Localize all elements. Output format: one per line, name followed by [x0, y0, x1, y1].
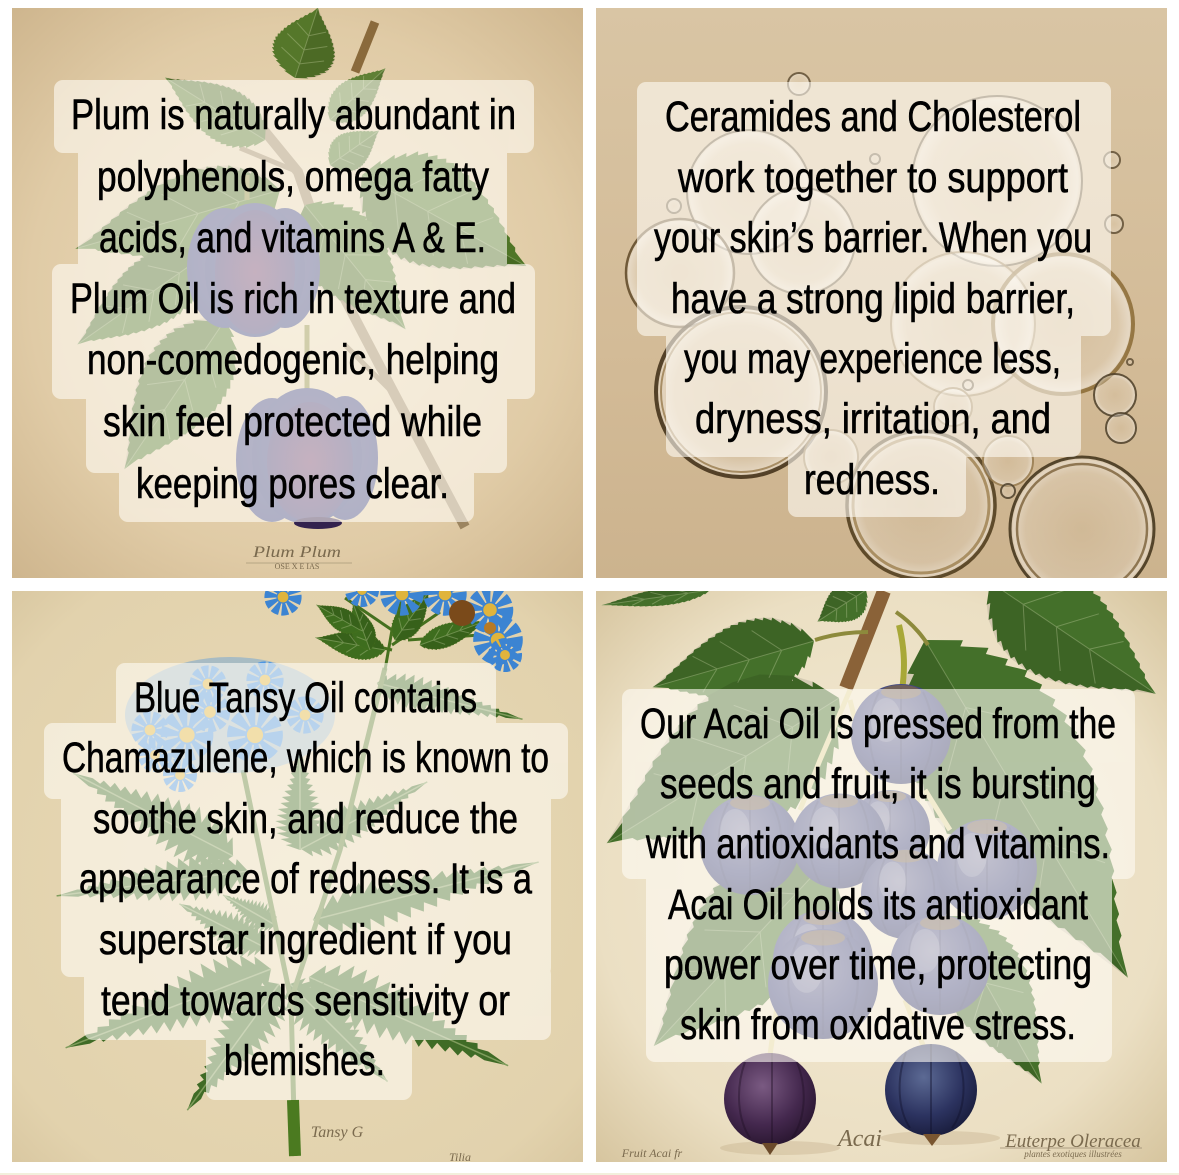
text block: plum: non-comedogenic, helping	[87, 336, 499, 384]
highlight shape	[44, 663, 568, 1100]
text block: ceramides: redness.	[804, 456, 940, 504]
caption: acai signatures: plantes exotiques illustrées	[1023, 1149, 1122, 1159]
text block: blue tansy: appearance of redness. It is a	[79, 855, 532, 903]
text block: blue tansy: superstar ingredient if you	[99, 916, 512, 964]
text block: ceramides: Ceramides and Cholesterol	[665, 93, 1081, 141]
text block: acai	[640, 700, 1116, 1049]
highlight shape	[52, 80, 535, 522]
text block: blue tansy: blemishes.	[224, 1037, 385, 1085]
text block: ceramides: dryness, irritation, and	[695, 395, 1051, 443]
text block: blue tansy: Chamazulene, which is known to	[62, 734, 549, 782]
text block: plum: Plum Oil is rich in texture and	[70, 275, 516, 323]
text block: plum: Plum is naturally abundant in	[71, 91, 516, 139]
caption: acai signatures: Fruit Acai fr	[621, 1146, 683, 1160]
caption: tansy signature	[312, 1126, 470, 1161]
panel: acai	[596, 591, 1167, 1162]
caption: acai signatures: Acai	[836, 1126, 882, 1152]
plum: lower	[236, 388, 378, 529]
illustration: acai stems	[770, 591, 950, 1055]
caption: plum signature: OSE X E IAS	[275, 562, 319, 571]
text block: plum: keeping pores clear.	[136, 460, 449, 508]
caption: acai signatures: Euterpe Oleracea	[1004, 1131, 1141, 1152]
highlight shape	[622, 689, 1135, 1062]
illustration: plum branch	[75, 8, 526, 530]
highlight shape	[637, 82, 1111, 517]
caption: tansy signature: Tilia	[449, 1150, 471, 1164]
text block: ceramides	[654, 93, 1092, 504]
text block: blue tansy: tend towards sensitivity or	[101, 977, 510, 1025]
illustration: tansy fronds and stem	[54, 666, 545, 1156]
caption: plum signature: Plum Plum	[252, 544, 341, 561]
text block: plum: skin feel protected while	[103, 398, 482, 446]
illustration: acai berries	[700, 684, 1037, 1155]
illustration: top blue flowers	[272, 580, 515, 665]
panel: ceramides	[596, 8, 1167, 601]
caption: tansy signature: Tansy G	[311, 1124, 364, 1141]
illustration: top foliage	[315, 595, 480, 670]
illustration: bubbles	[626, 73, 1154, 601]
text block: acai: skin from oxidative stress.	[680, 1001, 1076, 1049]
illustration: pale flower cluster	[125, 657, 335, 785]
caption: plum signature	[246, 546, 352, 569]
plum: upper	[187, 203, 320, 337]
berry: dark blue	[880, 1044, 1000, 1146]
illustration: acai leaves	[602, 591, 1156, 1084]
text block: plum	[70, 91, 516, 508]
berry: dark purple	[720, 1053, 840, 1155]
text block: blue tansy	[62, 674, 549, 1085]
text block: ceramides: you may experience less,	[684, 335, 1061, 383]
text block: ceramides: work together to support	[677, 154, 1068, 202]
caption: acai signatures	[622, 1130, 1142, 1160]
text block: ceramides: have a strong lipid barrier,	[671, 275, 1075, 323]
text block: acai: power over time, protecting	[664, 941, 1092, 989]
text block: plum: polyphenols, omega fatty	[97, 153, 489, 201]
panel: blue tansy	[12, 580, 583, 1164]
text block: blue tansy: Blue Tansy Oil contains	[134, 674, 477, 722]
text block: plum: acids, and vitamins A & E.	[99, 214, 486, 262]
text block: blue tansy: soothe skin, and reduce the	[93, 795, 518, 843]
panel: plum	[12, 0, 583, 578]
